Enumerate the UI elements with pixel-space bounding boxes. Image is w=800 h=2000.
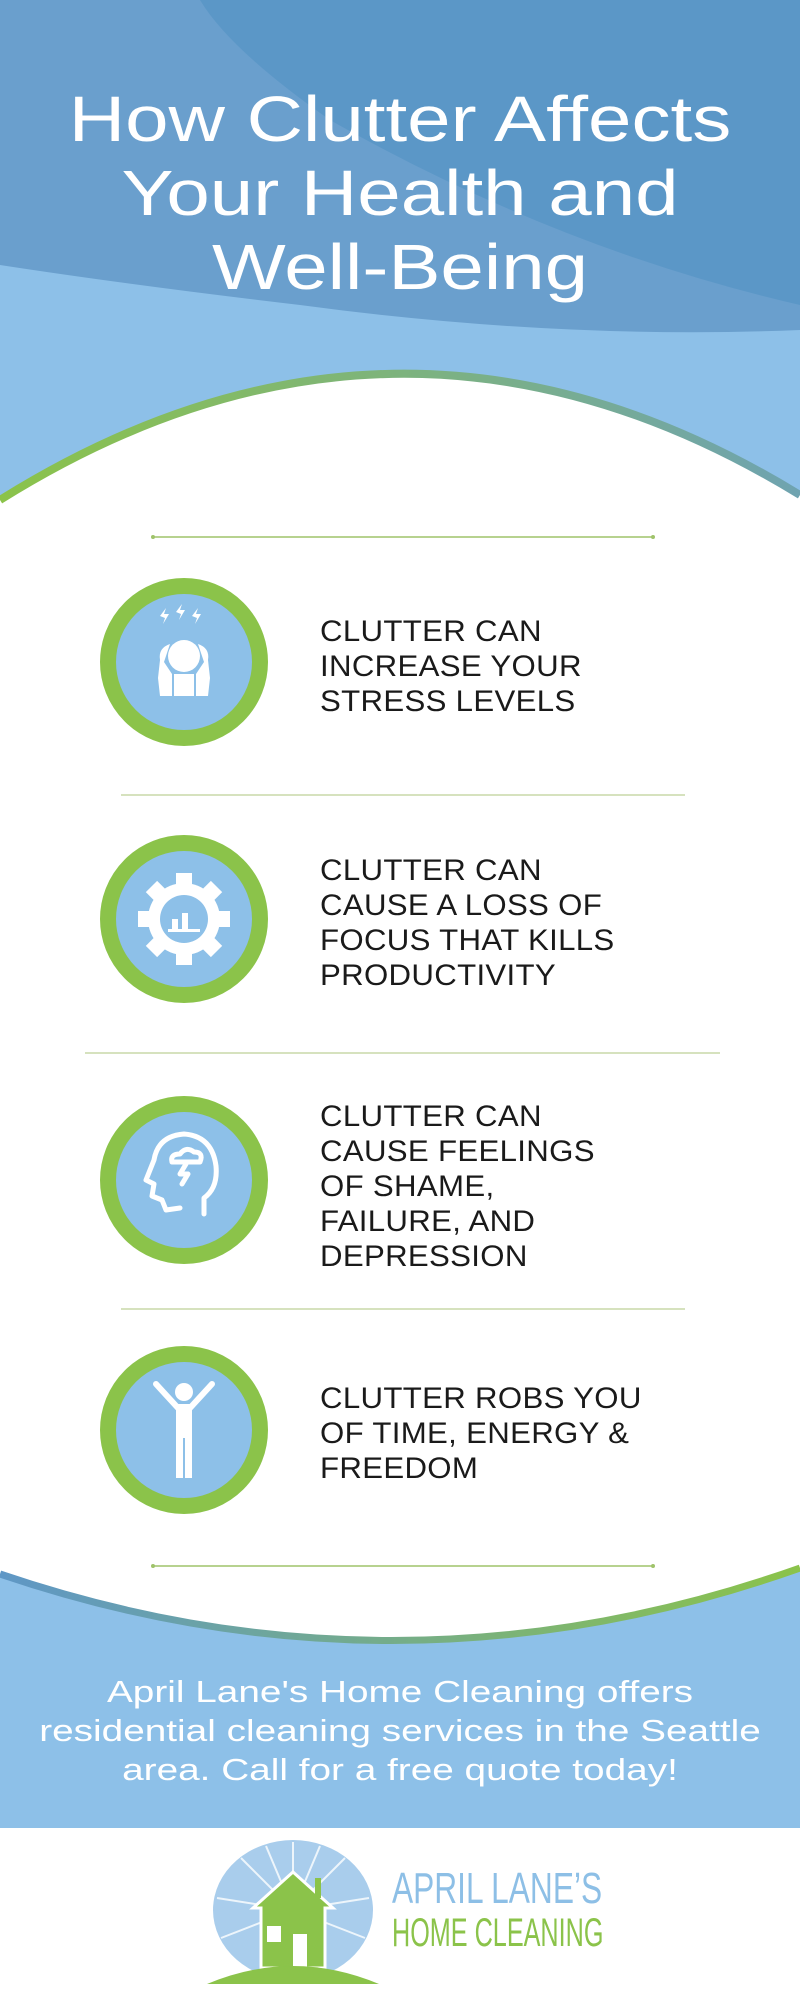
call to action text: area. Call for a free quote today! [122, 1752, 678, 1787]
text: shame: DEPRESSION [320, 1240, 528, 1273]
call to action text [39, 1674, 761, 1787]
title: How Clutter Affects [69, 83, 731, 155]
text: focus: CLUTTER CAN [320, 854, 542, 887]
text: time: FREEDOM [320, 1452, 478, 1485]
logo [207, 1840, 603, 1984]
icon: person arms up [100, 1346, 268, 1514]
text: focus: PRODUCTIVITY [320, 959, 556, 992]
text: shame: CAUSE FEELINGS [320, 1135, 595, 1168]
text: shame: OF SHAME, [320, 1170, 494, 1203]
icon: gear [100, 835, 268, 1003]
text: stress: STRESS LEVELS [320, 685, 576, 718]
icon: head with storm [100, 1096, 268, 1264]
logo text: APRIL LANE’S [392, 1864, 602, 1913]
logo text: HOME CLEANING [392, 1911, 603, 1955]
title: Well-Being [212, 231, 588, 303]
text: stress: CLUTTER CAN [320, 615, 542, 648]
text: focus [320, 854, 615, 992]
text: focus: CAUSE A LOSS OF [320, 889, 602, 922]
icon: stressed person [100, 578, 268, 746]
title: Your Health and [121, 157, 679, 229]
text: focus: FOCUS THAT KILLS [320, 924, 615, 957]
logo text [392, 1864, 603, 1955]
call to action text: residential cleaning services in the Seattle [39, 1713, 761, 1748]
text: shame [320, 1100, 595, 1273]
call to action text: April Lane's Home Cleaning offers [107, 1674, 693, 1709]
text: time [320, 1382, 642, 1485]
text: time: CLUTTER ROBS YOU [320, 1382, 642, 1415]
text: stress: INCREASE YOUR [320, 650, 582, 683]
logo icon: sun house [207, 1840, 379, 1984]
text: shame: CLUTTER CAN [320, 1100, 542, 1133]
text: stress [320, 615, 582, 718]
text: time: OF TIME, ENERGY & [320, 1417, 629, 1450]
title [69, 83, 731, 303]
text: shame: FAILURE, AND [320, 1205, 535, 1238]
